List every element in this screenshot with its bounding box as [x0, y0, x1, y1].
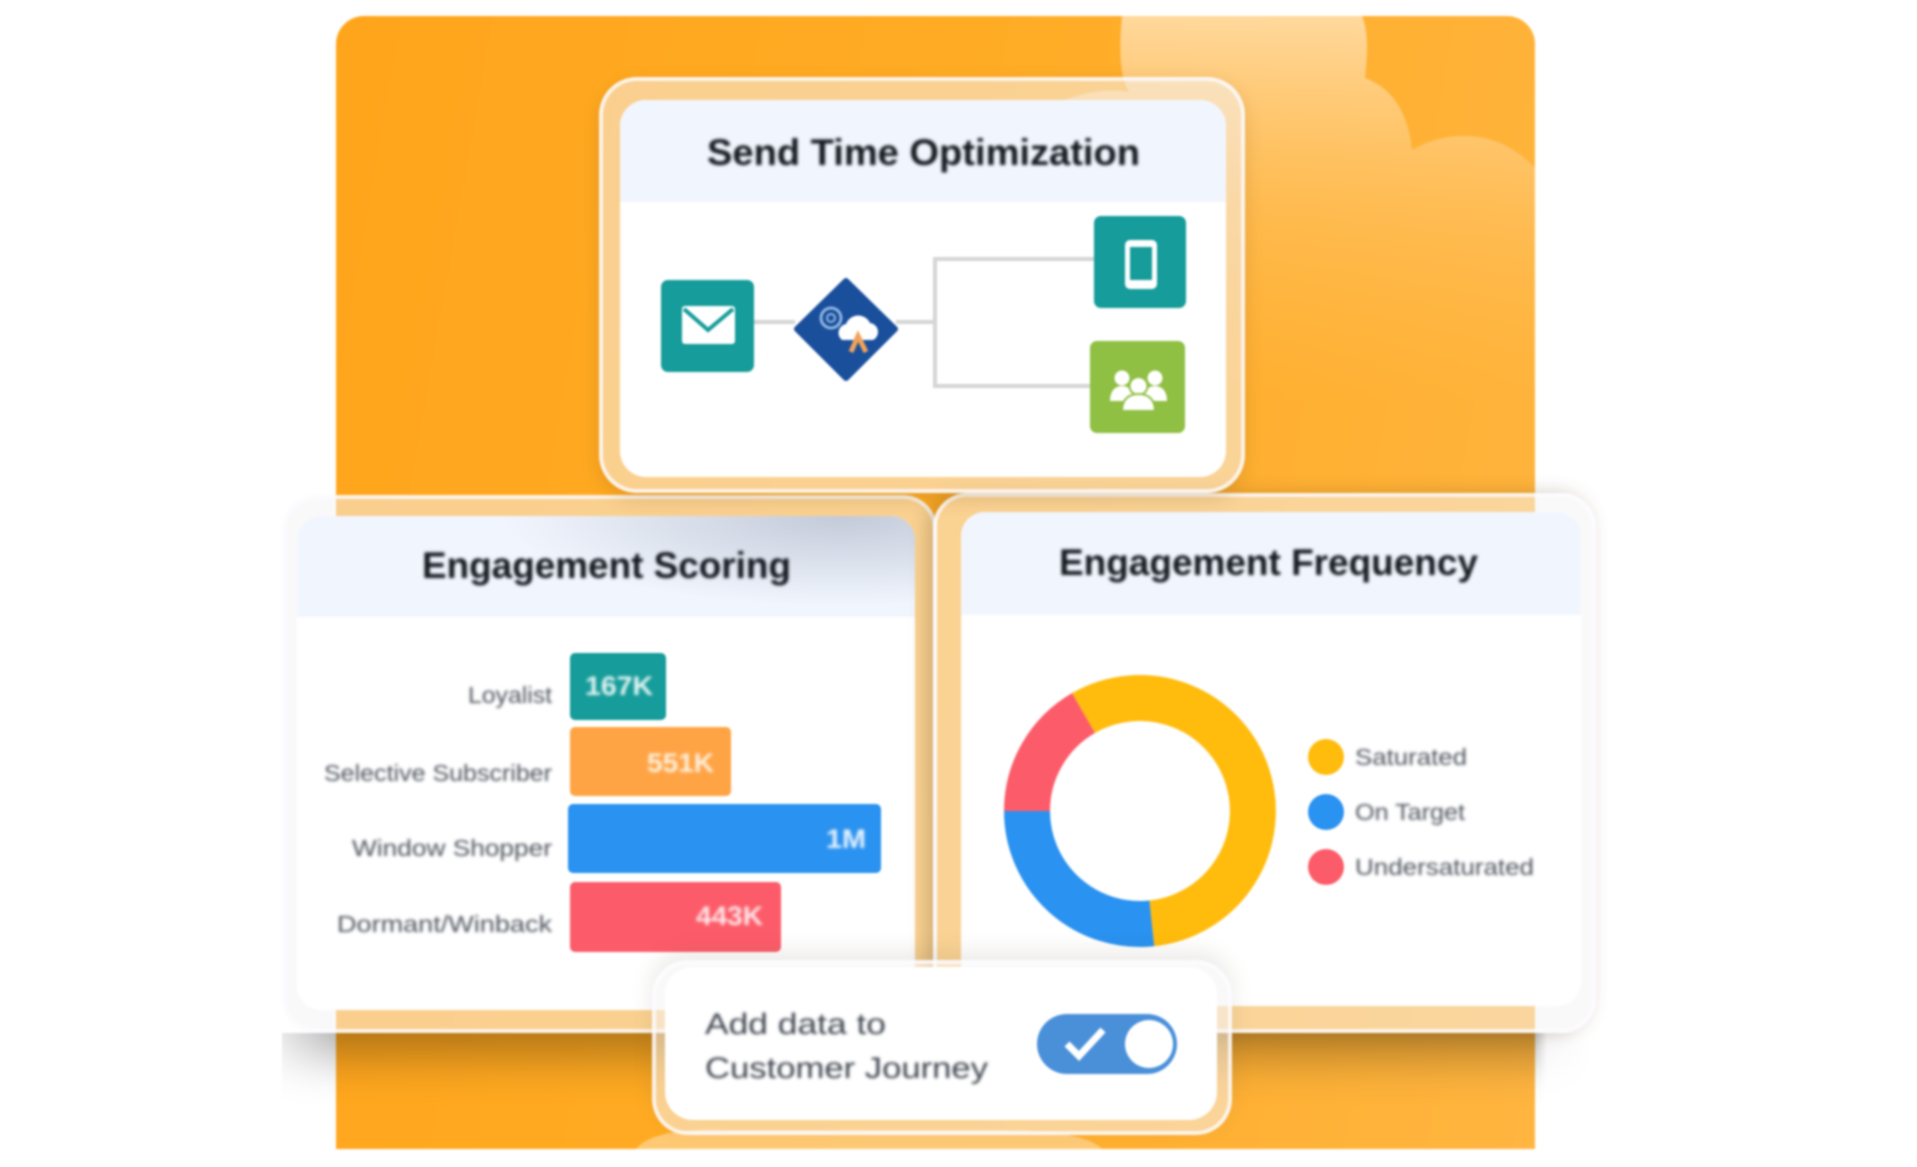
heading: Send Time Optimization: Send Time Optimization [707, 132, 1140, 173]
panel: Engagement Frequency [933, 493, 1596, 1033]
panel: Send Time Optimization [599, 77, 1245, 493]
card content: title and flow diagram [659, 132, 1188, 435]
callout card [665, 967, 1217, 1120]
callout content [703, 1008, 1178, 1086]
toggle switch [1037, 1014, 1177, 1074]
icon: audience group [1090, 341, 1185, 433]
axis labels: Window Shopper [352, 835, 552, 861]
axis labels [324, 682, 553, 937]
axis labels: Loyalist [468, 682, 553, 708]
panel: Engagement Scoring [282, 495, 937, 1033]
icon: mobile phone [1094, 216, 1186, 308]
bar chart [324, 653, 881, 952]
card: Engagement Frequency [961, 512, 1581, 1006]
axis labels: Dormant/Winback [337, 911, 553, 937]
heading: Engagement Frequency: Engagement Frequency [1059, 542, 1478, 583]
bar: Loyalist [570, 653, 666, 720]
card header with shadow [297, 516, 915, 617]
bar: Selective Subscriber [570, 727, 731, 796]
bar: Dormant/Winback [570, 882, 781, 952]
card: Engagement Scoring [297, 516, 915, 1010]
text: Add data to Customer Journey: Customer Journey [705, 1052, 988, 1085]
drop shadow beneath lower cards [282, 1032, 1548, 1084]
callout: add data toggle [652, 960, 1232, 1135]
legend [1308, 739, 1534, 885]
bar: Selective Subscriber: 551K [647, 748, 715, 778]
legend item: On Target: On Target [1355, 799, 1466, 825]
text: Add data to Customer Journey: Add data to [705, 1008, 886, 1041]
card header [961, 512, 1581, 615]
segment: On Target [1027, 811, 1152, 924]
text: Add data to Customer Journey [705, 1008, 988, 1085]
legend item: Undersaturated: Undersaturated [1355, 854, 1534, 880]
bar: Window Shopper: 1M [826, 824, 866, 854]
connector lines [754, 259, 1094, 386]
card content: title and bar chart [324, 545, 883, 954]
bar: Dormant/Winback: 443K [696, 901, 764, 931]
legend item: On Target [1308, 794, 1466, 830]
heading: Engagement Scoring: Engagement Scoring [422, 545, 791, 586]
legend item: Saturated [1308, 739, 1467, 775]
cloud decoration top right [636, 14, 1536, 1150]
legend item: Undersaturated [1308, 849, 1534, 885]
segment: Saturated [1084, 698, 1253, 923]
card content: title, donut, legend [1002, 542, 1535, 949]
icon: send time optimization diamond [797, 281, 895, 378]
card header [620, 100, 1226, 202]
axis labels: Selective Subscriber [324, 760, 552, 786]
orange background panel [336, 16, 1535, 1149]
segment: Undersaturated [1027, 713, 1084, 811]
icon: email [661, 280, 754, 372]
card: Send Time Optimization [620, 100, 1226, 477]
donut chart [1027, 698, 1253, 924]
bar: Window Shopper [568, 804, 881, 873]
bar: Loyalist: 167K [585, 671, 654, 701]
legend item: Saturated: Saturated [1355, 744, 1467, 770]
